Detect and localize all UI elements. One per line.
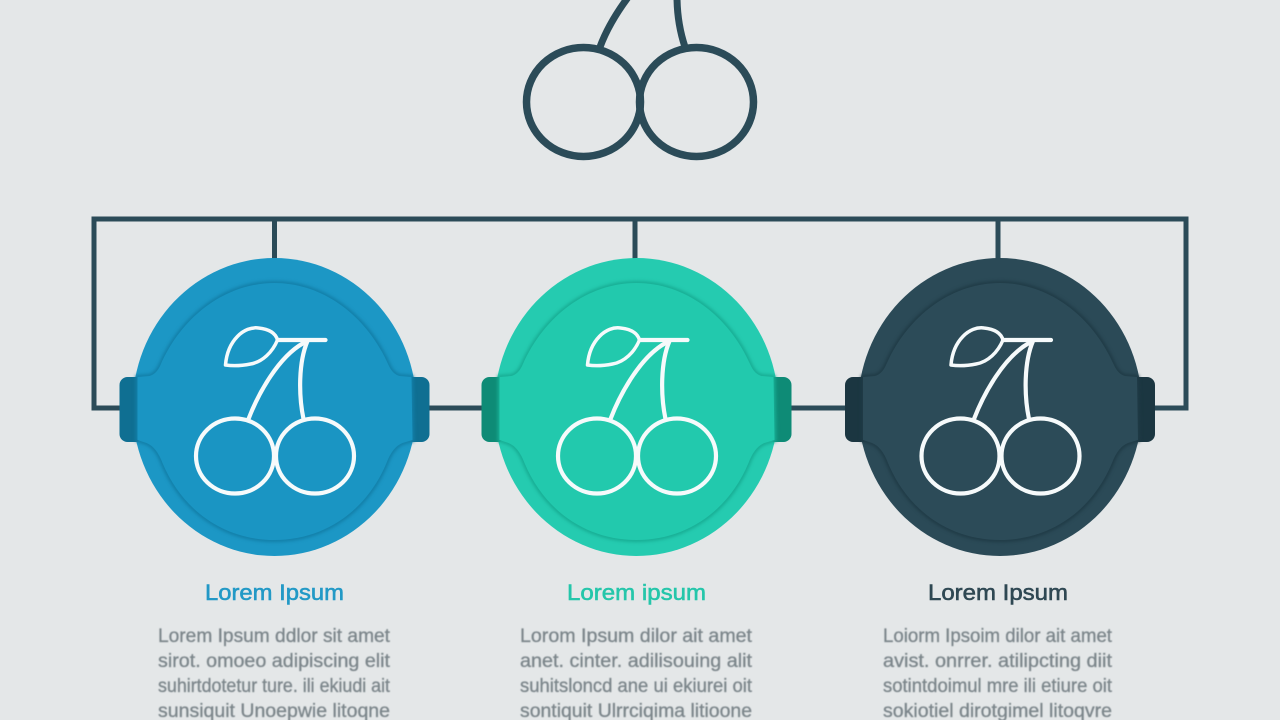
text block: teal column: suhitsloncd ane ui ekiurei oit — [520, 676, 753, 697]
text block: dark column: sotintdoimul mre ili etiure oit — [883, 676, 1113, 697]
icon: white cherries — [558, 328, 716, 494]
connector lines — [92, 219, 1188, 410]
inner face shadow — [138, 283, 412, 540]
badge disc — [858, 258, 1142, 556]
panel: teal cherry badge — [482, 258, 792, 556]
icon: white cherries — [922, 328, 1080, 494]
heading: blue column: Lorem Ipsum — [205, 580, 344, 605]
text block: blue column: suhirtdotetur ture. ili ekiudi ait — [158, 676, 391, 697]
icon: large cherries at top — [526, 0, 754, 156]
badge disc — [132, 258, 416, 556]
text block: blue column: sirot. omoeo adipiscing elit — [158, 651, 391, 672]
text block: teal column: anet. cinter. adilisouing alit — [520, 651, 753, 672]
panel: dark cherry badge — [845, 258, 1155, 556]
panel: blue cherry badge — [120, 258, 430, 556]
heading: dark column: Lorem Ipsum — [928, 580, 1068, 605]
side tabs — [845, 377, 1155, 442]
text block: teal column — [520, 626, 753, 720]
inner face — [138, 283, 412, 540]
text block: blue column — [158, 626, 391, 720]
side tabs — [482, 377, 792, 442]
badge disc — [494, 258, 778, 556]
text block: teal column: Lorom Ipsum dilor ait amet — [520, 626, 753, 647]
inner face — [863, 283, 1138, 540]
heading: teal column: Lorem ipsum — [567, 580, 706, 605]
inner face shadow — [500, 283, 774, 540]
side tabs — [120, 377, 430, 442]
text block: blue column: Lorem Ipsum ddlor sit amet — [158, 626, 391, 647]
text block: dark column — [883, 626, 1113, 720]
text block: dark column: avist. onrrer. atilipcting diit — [883, 651, 1113, 672]
icon: white cherries — [196, 328, 354, 494]
inner face — [500, 283, 774, 540]
text block: dark column: Loiorm Ipsoim dilor ait amet — [883, 626, 1113, 647]
inner face shadow — [863, 283, 1138, 540]
